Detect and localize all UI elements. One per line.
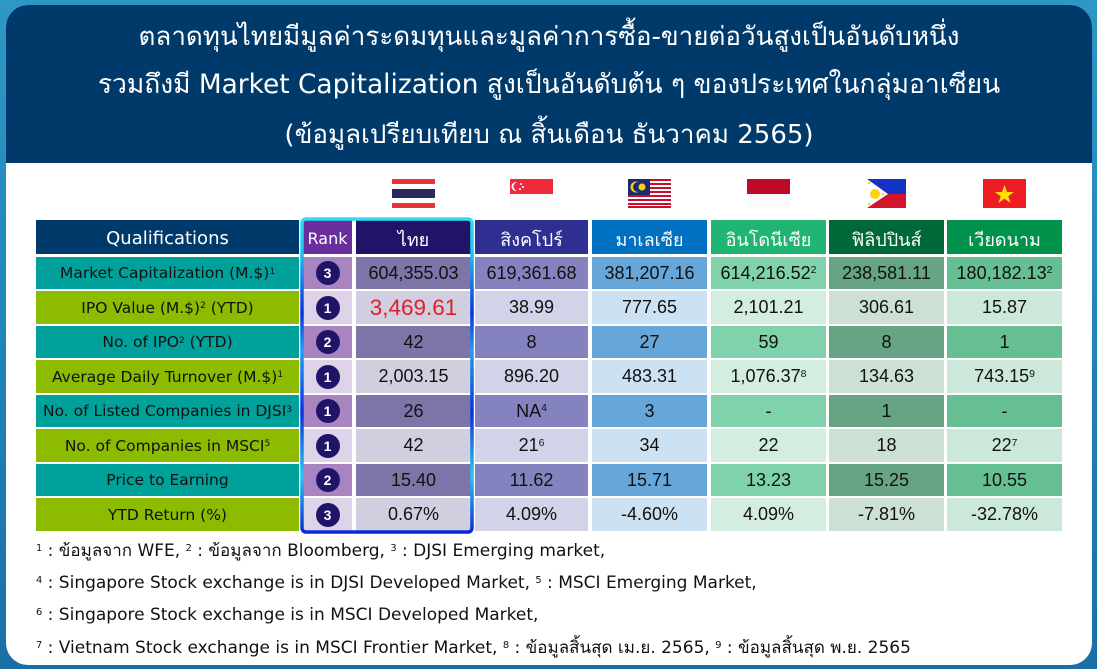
row: Market Capitalization: 3 [324,265,331,281]
row: No. of IPO: 2 [324,334,331,350]
row: YTD Return: -4.60% [621,504,678,524]
row: Price to Earning: 13.23 [746,470,791,490]
title banner [6,5,1092,163]
row: Average Daily Turnover: Average Daily Turnover (M.$)1 [52,368,283,386]
row: IPO Value: 777.65 [622,297,677,317]
row: IPO Value: 15.87 [982,297,1027,317]
row: Average Daily Turnover: 743.159 [974,366,1035,386]
row: YTD Return: 3 [324,506,331,522]
table header row: อินโดนีเซีย [726,230,811,250]
row: Price to Earning: 15.25 [864,470,909,490]
row: No. of IPO: 59 [758,332,779,352]
row: No. of IPO: 8 [526,332,536,352]
row: Market Capitalization: 604,355.03 [368,262,459,282]
row: No. of Companies in MSCI [36,429,1062,462]
icon: Indonesia flag [747,179,790,194]
row: No. of Companies in MSCI: 216 [519,435,544,455]
row: No. of Listed Companies in DJSI: 1 [881,400,892,420]
row: No. of Listed Companies in DJSI: 3 [644,400,654,420]
row: Price to Earning: 10.55 [982,470,1027,490]
row: Price to Earning [36,464,1062,496]
row: No. of Listed Companies in DJSI: No. of Listed Companies in DJSI3 [43,402,292,420]
row: No. of Listed Companies in DJSI [36,395,1062,427]
row: YTD Return: 4.09% [743,504,794,524]
table header row: Qualifications [106,228,229,249]
row: Market Capitalization: 614,216.522 [721,262,816,282]
row: Average Daily Turnover: 1 [324,368,331,384]
row: No. of IPO: 8 [881,332,892,352]
row: Average Daily Turnover: 2,003.15 [378,366,449,386]
row: IPO Value: 1 [324,300,331,316]
table header row: สิงคโปร์ [500,230,563,250]
row: Market Capitalization: 238,581.11 [842,262,931,282]
highlight frame around Thailand column [300,217,474,534]
icon: Philippines flag [867,179,906,208]
row: IPO Value: 2,101.21 [733,297,804,317]
row: Market Capitalization: 180,182.132 [957,262,1052,282]
row: Average Daily Turnover: 483.31 [622,366,677,386]
table header row: ฟิลิปปินส์ [852,230,921,250]
footnote line 3: 6 : Singapore Stock exchange is in MSCI Developed Market, [36,605,538,625]
table: comparison of ASEAN markets [36,220,1062,531]
row: YTD Return: 0.67% [388,504,439,524]
footnotes [36,541,911,658]
row: No. of Listed Companies in DJSI: - [766,400,772,420]
title line 1: ตลาดทุนไทยมีมูลค่าระดมทุนและมูลค่าการซื้อ-ขายต่อวันสูงเป็นอันดับหนึ่ง [138,22,960,52]
icon: Malaysia flag [628,179,671,208]
row: Price to Earning: 15.71 [627,470,672,490]
row: YTD Return: YTD Return (%) [108,506,227,524]
row: YTD Return: -7.81% [858,504,915,524]
row: No. of IPO: 42 [403,332,424,352]
row: No. of Companies in MSCI: 42 [403,435,424,455]
icon: Vietnam flag [983,179,1026,208]
row: Average Daily Turnover [36,360,1062,393]
row: Average Daily Turnover: 134.63 [859,366,914,386]
row: Price to Earning: Price to Earning [106,471,229,489]
row: Price to Earning: 11.62 [510,470,553,490]
row: YTD Return: -32.78% [971,504,1038,524]
row: No. of IPO: 27 [639,332,660,352]
title line 2: รวมถึงมี Market Capitalization สูงเป็นอันดับต้น ๆ ของประเทศในกลุ่มอาเซียน [98,69,1000,100]
row: No. of IPO: 1 [999,332,1010,352]
row: No. of Companies in MSCI: No. of Companies in MSCI5 [65,436,270,454]
row: No. of Listed Companies in DJSI: 26 [403,400,424,420]
row: No. of Companies in MSCI: 18 [876,435,897,455]
row: Market Capitalization [36,257,1062,289]
icon: Thailand flag [392,179,435,208]
table header row: เวียดนาม [968,230,1041,250]
row: IPO Value: 306.61 [859,297,914,317]
row: No. of Listed Companies in DJSI: - [1002,400,1008,420]
table header row: มาเลเซีย [615,230,684,250]
row: Price to Earning: 15.40 [391,470,436,490]
row: IPO Value [36,291,1062,324]
table header row [36,220,1062,254]
table header row: Rank [308,228,347,248]
row: No. of Companies in MSCI: 34 [639,435,660,455]
table header row: ไทย [398,230,429,250]
row: No. of Listed Companies in DJSI: 1 [324,403,331,419]
row: IPO Value: IPO Value (M.$)2 (YTD) [81,298,254,316]
row: No. of IPO [36,326,1062,358]
icon: Singapore flag [510,179,553,194]
footnote line 2: 4 : Singapore Stock exchange is in DJSI Developed Market, 5 : MSCI Emerging Market, [36,573,757,593]
row: YTD Return: 4.09% [506,504,557,524]
footnote line 4: 7 : Vietnam Stock exchange is in MSCI Frontier Market, 8 : ข้อมูลสิ้นสุด เม.ย. 2565, 9 : ข้อมูลสิ้นสุด พ.ย. 2565 [36,638,911,658]
row: YTD Return [36,498,1062,531]
row: Average Daily Turnover: 1,076.378 [731,366,806,386]
row: IPO Value: 3,469.61 [370,294,457,320]
row: No. of Companies in MSCI: 22 [758,435,779,455]
row: No. of Companies in MSCI: 1 [324,438,331,454]
row: Average Daily Turnover: 896.20 [504,366,559,386]
row: No. of Companies in MSCI: 227 [992,435,1017,455]
row: Price to Earning: 2 [324,472,331,488]
row: Market Capitalization: 619,361.68 [486,262,577,282]
row: Market Capitalization: Market Capitalization (M.$)1 [60,264,275,282]
row: No. of IPO: No. of IPO2 (YTD) [102,333,233,351]
row: Market Capitalization: 381,207.16 [604,262,695,282]
row: IPO Value: 38.99 [509,297,554,317]
row: No. of Listed Companies in DJSI: NA4 [516,400,547,420]
title line 3: (ข้อมูลเปรียบเทียบ ณ สิ้นเดือน ธันวาคม 2565) [284,120,814,150]
footnote line 1: 1 : ข้อมูลจาก WFE, 2 : ข้อมูลจาก Bloomberg, 3 : DJSI Emerging market, [36,541,605,561]
